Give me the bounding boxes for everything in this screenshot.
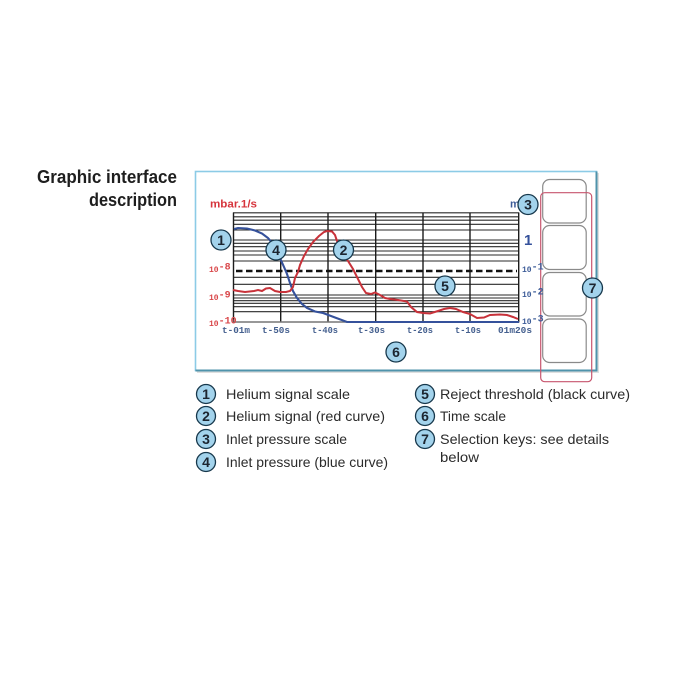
legend: right column: below [440, 449, 480, 465]
title: description [89, 190, 177, 210]
inlet pressure (blue curve) [234, 228, 519, 322]
chart callouts 1 to 7: 7 [589, 280, 597, 296]
inlet pressure scale labels: 10 [522, 291, 532, 300]
time scale labels: t-01m [222, 326, 251, 336]
helium scale labels [209, 198, 257, 329]
inlet pressure scale labels: -3 [532, 314, 544, 326]
chart: signal and pressure curves [233, 212, 519, 322]
helium scale labels: 10 [209, 266, 219, 275]
legend: right column: Selection keys: see details [440, 431, 609, 447]
helium scale labels: 10 [209, 294, 219, 303]
inlet pressure scale labels: -1 [532, 262, 544, 274]
inlet pressure scale labels: 10 [522, 318, 532, 327]
time scale labels: t-30s [358, 326, 385, 336]
inlet pressure scale labels: 10 [522, 266, 532, 275]
inlet pressure scale labels: m [510, 198, 520, 210]
legend: left column [196, 384, 388, 472]
chart grid [233, 212, 519, 322]
chart callouts 1 to 7 [211, 194, 602, 362]
inlet pressure scale labels: -2 [532, 288, 544, 298]
chart callouts 1 to 7: 6 [392, 344, 400, 360]
time scale labels: 01m20s [498, 326, 532, 336]
legend: left column: 3 [202, 431, 210, 447]
selection keys [543, 180, 586, 362]
helium scale labels: -10 [219, 316, 237, 328]
helium scale labels: -8 [219, 262, 231, 274]
time scale labels: t-40s [312, 326, 338, 336]
helium signal (red curve) [233, 231, 518, 319]
title [37, 167, 177, 210]
chart callouts 1 to 7: 2 [340, 242, 348, 258]
reject threshold (black dashed curve) [236, 270, 517, 272]
legend: left column: 2 [202, 408, 210, 424]
chart callouts 1 to 7: 5 [441, 278, 449, 294]
legend: left column: 1 [202, 386, 210, 402]
chart callouts 1 to 7: 3 [524, 196, 532, 212]
time scale labels [222, 326, 532, 336]
legend: left column: 4 [202, 454, 210, 470]
helium scale labels: 10 [209, 320, 219, 329]
inlet pressure scale labels: 1 [524, 232, 532, 249]
inlet pressure scale labels [510, 198, 544, 327]
legend: left column: Helium signal scale [226, 386, 350, 402]
title: Graphic interface [37, 167, 177, 187]
chart callouts 1 to 7: 1 [217, 232, 225, 248]
selection keys outline [541, 193, 592, 382]
panel: graphic interface screen [196, 172, 599, 373]
legend: right column: 7 [421, 431, 429, 447]
legend: left column: Helium signal (red curve) [226, 408, 385, 424]
legend: right column [416, 384, 630, 465]
legend: right column: 5 [421, 386, 429, 402]
chart callouts 1 to 7: 4 [272, 242, 280, 258]
legend: left column: Inlet pressure scale [226, 431, 347, 447]
time scale labels: t-20s [407, 326, 433, 336]
time scale labels: t-50s [262, 326, 290, 336]
legend: right column: Reject threshold (black curve) [440, 386, 630, 402]
helium scale labels: -9 [219, 290, 231, 302]
time scale labels: t-10s [455, 326, 481, 336]
legend: right column: 6 [421, 408, 429, 424]
legend: left column: Inlet pressure (blue curve) [226, 454, 388, 470]
helium scale labels: mbar.1/s [210, 198, 257, 210]
legend: right column: Time scale [440, 408, 506, 424]
